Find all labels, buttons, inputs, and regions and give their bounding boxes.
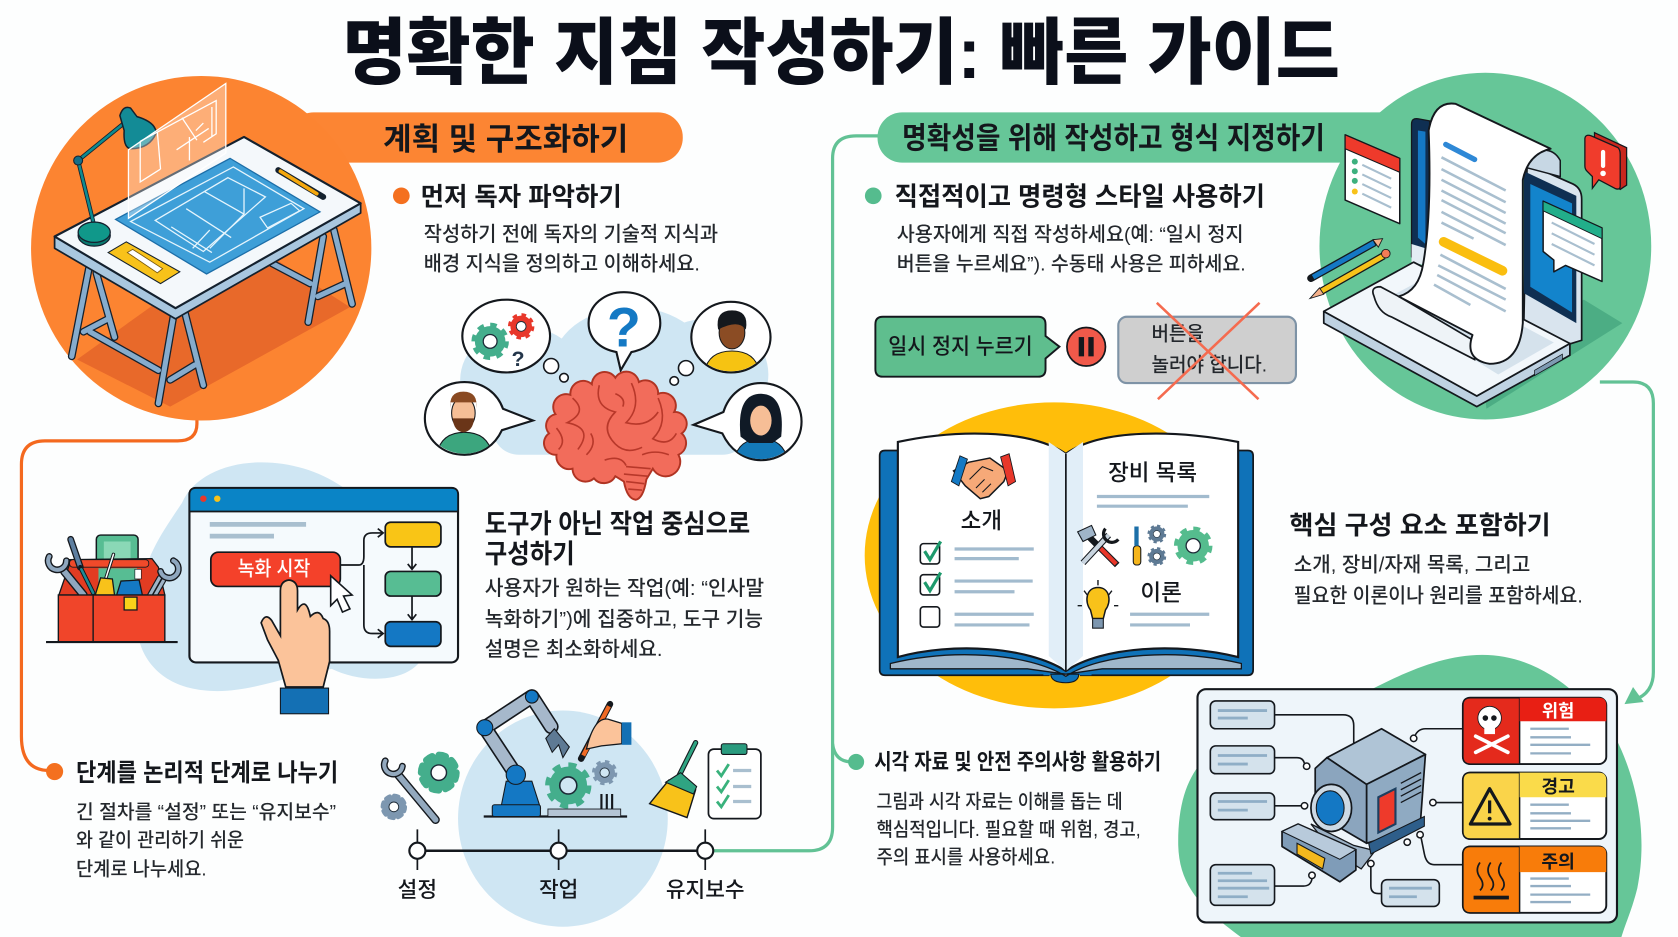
note card xyxy=(1543,201,1602,281)
subheading: core components: 핵심 구성 요소 포함하기 xyxy=(1290,511,1551,540)
illustration: setup, work, maintenance xyxy=(383,690,761,927)
text: logical steps body: 긴 절차를 “설정” 또는 “유지보수” xyxy=(76,802,336,824)
text: core components body: 소개, 장비/자재 목록, 그리고 xyxy=(1294,553,1530,576)
machine xyxy=(1282,729,1425,882)
subheading: logical steps: 단계를 논리적 단계로 나누기 xyxy=(76,759,338,787)
connector: orange flow line xyxy=(21,417,197,770)
callout: don't example: 버튼을 xyxy=(1151,323,1204,345)
text: direct style body xyxy=(897,224,1246,276)
callout: don't example: 놀러야 합니다. xyxy=(1151,354,1267,376)
blueprint xyxy=(116,158,320,274)
pencils xyxy=(1310,239,1390,299)
sleeve xyxy=(280,688,329,714)
subheading: organize around tasks: 도구가 아닌 작업 중심으로 xyxy=(485,509,750,539)
leader lines xyxy=(1275,715,1463,894)
text: core components body xyxy=(1294,553,1583,607)
connector: green arrow to safety panel xyxy=(1600,382,1653,704)
illustration: open manual xyxy=(865,402,1253,708)
callout: don't example xyxy=(1118,303,1296,399)
bubble: question: ? xyxy=(607,297,641,359)
paper tail xyxy=(1373,287,1477,360)
text: core components body: 필요한 이론이나 원리를 포함하세요. xyxy=(1294,584,1583,607)
left page heading: 소개 xyxy=(961,509,1002,534)
paper lines xyxy=(1434,157,1506,311)
text: visuals and safety body: 주의 표시를 사용하세요. xyxy=(876,847,1055,869)
front legs xyxy=(72,269,203,403)
bubble: person right xyxy=(693,383,802,460)
laptop shadow xyxy=(1482,300,1622,409)
paper curl behind xyxy=(1524,150,1560,177)
laptop screen xyxy=(1524,164,1582,345)
right page heading: 장비 목록 xyxy=(1108,460,1197,485)
wrench and gears xyxy=(383,755,456,820)
alert bubble xyxy=(1585,133,1627,189)
back legs xyxy=(272,230,352,322)
subheading: direct imperative style: 직접적이고 명령형 스타일 사용하기 xyxy=(895,181,1265,211)
text: organize around tasks body xyxy=(485,577,764,661)
callout: do example: 일시 정지 누르기 xyxy=(888,334,1033,359)
section header: planning xyxy=(289,112,683,163)
ruler xyxy=(108,242,180,284)
bubble: gears xyxy=(462,300,550,372)
text: logical steps body: 단계로 나누세요. xyxy=(76,858,207,880)
flow chart xyxy=(340,529,416,638)
caution card: 주의 xyxy=(1541,852,1575,872)
title: 명확한 지침 작성하기: 빠른 가이드 xyxy=(342,13,1340,94)
button xyxy=(211,552,340,586)
illustration: document on laptop xyxy=(878,73,1651,419)
caution card xyxy=(1463,846,1606,913)
desk top xyxy=(55,203,361,319)
paper scroll xyxy=(1399,103,1551,364)
timeline labels: 유지보수 xyxy=(666,878,745,902)
button: 녹화 시작 xyxy=(238,558,311,581)
handshake xyxy=(951,454,1016,499)
laptop base xyxy=(1324,311,1570,407)
illustration: audience around brain xyxy=(425,292,802,500)
text: logical steps body xyxy=(76,802,336,880)
hand with pen xyxy=(581,704,631,759)
text: direct style body: 사용자에게 직접 작성하세요(예: “일시 정지 xyxy=(897,224,1244,246)
theory heading: 이론 xyxy=(1140,580,1182,605)
desk shadow xyxy=(77,257,350,407)
toolbox body xyxy=(58,595,165,642)
bubble: person top right xyxy=(691,302,771,372)
text: organize around tasks body: 녹화하기”)에 집중하고, 도구 기능 xyxy=(485,608,763,631)
section header: planning: 계획 및 구조화하기 xyxy=(383,122,628,157)
text: logical steps body: 와 같이 관리하기 쉬운 xyxy=(76,829,244,851)
bubble: question xyxy=(589,292,660,370)
text: visuals and safety body: 핵심적입니다. 필요할 때 위험, 경고, xyxy=(876,819,1141,841)
text: direct style body: 버튼을 누르세요”). 수동태 사용은 피하세요. xyxy=(897,254,1246,276)
danger card: 위험 xyxy=(1542,701,1574,721)
warning card xyxy=(1463,773,1606,839)
tools xyxy=(48,539,178,595)
cursor xyxy=(331,576,352,612)
text: organize around tasks body: 사용자가 원하는 작업(예: “인사말 xyxy=(485,577,764,600)
text: organize around tasks body: 설명은 최소화하세요. xyxy=(485,638,662,661)
text: know the reader body: 작성하기 전에 독자의 기술적 지식과 xyxy=(424,223,718,246)
callout: do example xyxy=(875,317,1059,377)
thought dots xyxy=(544,358,693,385)
text: know the reader body: 배경 지식을 정의하고 이해하세요. xyxy=(424,253,700,276)
toolbox back xyxy=(96,535,138,571)
warning card: 경고 xyxy=(1541,777,1575,797)
subheading: visuals and safety: 시각 자료 및 안전 주의사항 활용하기 xyxy=(874,749,1161,774)
icon: pause xyxy=(1067,327,1105,366)
pencil xyxy=(278,170,323,197)
text: know the reader body xyxy=(424,223,718,276)
timeline xyxy=(409,829,713,870)
section header: clarity: 명확성을 위해 작성하고 형식 지정하기 xyxy=(902,123,1325,156)
robot arm xyxy=(477,690,627,817)
checklist xyxy=(920,541,1034,627)
text: visuals and safety body: 그림과 시각 자료는 이해를 돕는 데 xyxy=(876,791,1123,813)
bubble: person left xyxy=(425,382,533,455)
illustration: equipment safety panel xyxy=(1178,655,1642,937)
illustration: toolbox xyxy=(46,535,178,642)
broom xyxy=(650,743,697,818)
clipboard xyxy=(708,744,761,819)
translucent plan sheet xyxy=(128,83,226,218)
danger card xyxy=(1463,698,1606,764)
bulb xyxy=(1078,580,1118,628)
subheading: know the reader: 먼저 독자 파악하기 xyxy=(421,182,622,211)
hand xyxy=(261,580,330,687)
timeline labels: 작업 xyxy=(539,878,578,902)
connector: green flow line xyxy=(711,136,880,851)
tools icons xyxy=(1078,525,1209,565)
brain xyxy=(544,372,687,500)
subheading: organize around tasks xyxy=(485,509,750,569)
label boxes xyxy=(1210,701,1439,906)
subheading: organize around tasks: 구성하기 xyxy=(485,539,575,569)
timeline labels xyxy=(398,878,745,902)
timeline labels: 설정 xyxy=(398,878,437,902)
illustration: recording window xyxy=(136,462,458,714)
checklist card xyxy=(1345,135,1400,224)
text: visuals and safety body xyxy=(876,791,1141,869)
lamp xyxy=(74,107,156,246)
section header: clarity xyxy=(878,112,1413,163)
bubble: gears: ? xyxy=(512,347,525,371)
illustration: drafting desk xyxy=(31,76,371,421)
